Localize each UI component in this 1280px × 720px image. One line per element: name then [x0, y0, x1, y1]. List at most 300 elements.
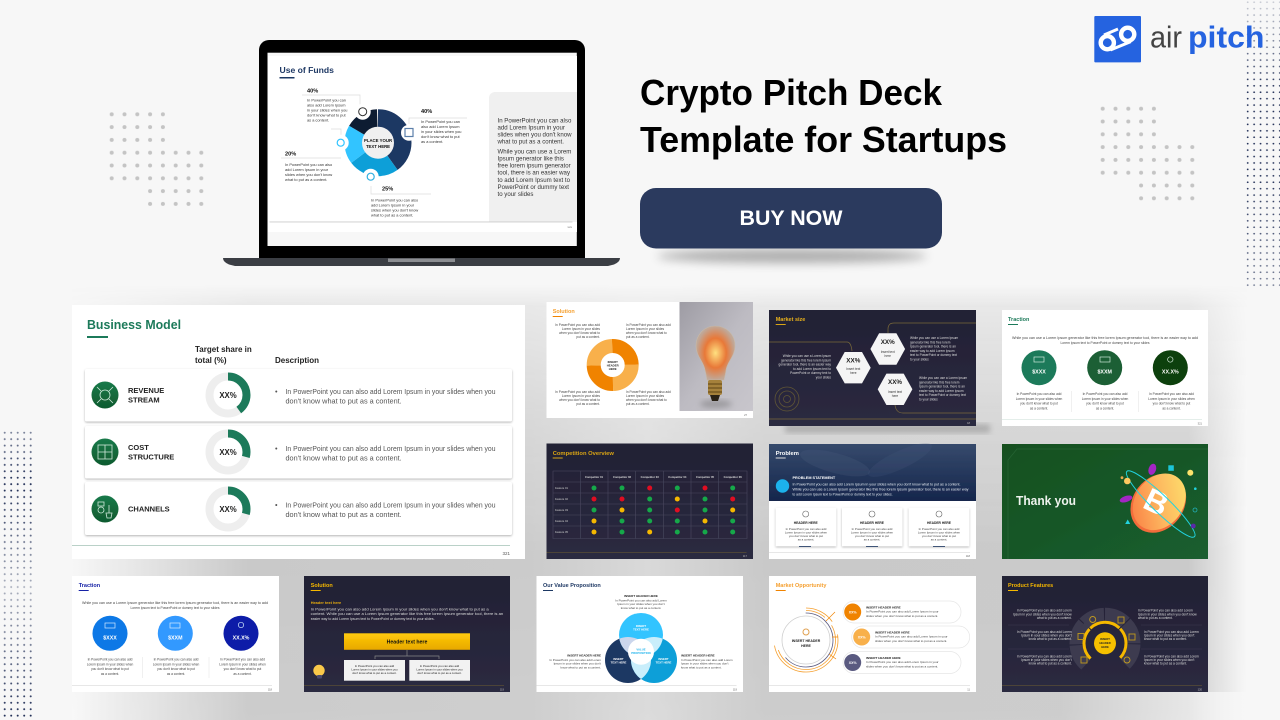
text block top: know what to put as a content. — [621, 606, 661, 610]
metric: $XXM: $XXM — [1097, 370, 1112, 376]
row: revenue stream: STREAM — [128, 396, 160, 404]
hexagon: bottom: XX% — [888, 379, 902, 386]
text block left — [549, 654, 602, 669]
card 2 — [842, 508, 902, 547]
captions: as a content. — [101, 672, 119, 676]
heading: Product Features — [1008, 583, 1053, 589]
photo: light bulb — [680, 302, 753, 411]
side panel: slides when you don't know — [498, 132, 572, 138]
text block right: INSERT HEADER HERE — [681, 654, 715, 658]
captions: In PowerPoint you can also add — [1017, 392, 1062, 396]
venn diagram: TEXT HERE — [633, 628, 649, 632]
row: channels: • — [275, 500, 278, 510]
footer: 120 — [1198, 688, 1203, 692]
text blocks left: Ipsum in your slides when you don't know — [1013, 612, 1072, 616]
footer: 118 — [966, 554, 971, 558]
venn diagram: VALUE — [636, 648, 646, 652]
comparison table: Competitor 02 — [613, 475, 632, 479]
venn diagram: TEXT HERE — [611, 660, 626, 664]
text blocks: While you can use a Lorem Ipsum — [910, 336, 959, 340]
intro text: Lorem Ipsum text to PowerPoint or dummy text to your slides — [130, 606, 220, 610]
text blocks — [555, 323, 671, 406]
text block right — [681, 654, 733, 669]
heading: Traction — [1008, 317, 1030, 323]
heading: Traction — [79, 583, 101, 589]
donut label: HERE — [609, 367, 617, 371]
text box left: In PowerPoint you can also add — [355, 664, 395, 668]
card 1: you don't know what to put — [789, 534, 823, 538]
intro text: While you can use a Lorem Ipsum generator like this free lorem Ipsum generator tool, there is an easier way to add — [82, 601, 268, 605]
body text: In PowerPoint you can also add Lorem Ipsum in your slides when you don't know what to put as a — [311, 608, 489, 612]
item 3 — [843, 652, 961, 674]
dividers — [1072, 391, 1138, 412]
comparison table: Competitor 05 — [696, 475, 715, 479]
text blocks right: Ipsum in your slides when you don't — [1144, 634, 1195, 638]
hexagon: left: XX% — [846, 358, 861, 364]
text blocks — [779, 336, 968, 402]
captions: Lorem Ipsum in your slides when — [1016, 397, 1063, 401]
captions: as a content. — [233, 672, 252, 676]
captions: Lorem Ipsum in your slides when — [1148, 397, 1195, 401]
heading: Thank you — [1016, 493, 1076, 508]
callout 40% left: don't know what to put — [307, 112, 347, 118]
text box left: Lorem Ipsum in your slides when you — [351, 668, 398, 672]
row: channels — [85, 482, 512, 535]
row: channels: In PowerPoint you can also add Lorem Ipsum in your slides when you — [286, 500, 496, 510]
text blocks: generator tool, there is an easier way — [779, 363, 831, 367]
photo header — [769, 437, 976, 501]
comparison table: Competitor 04 — [668, 475, 687, 479]
text blocks: generator like this free lorem Ipsum — [781, 358, 831, 362]
card 2: HEADER HERE — [860, 521, 885, 525]
captions: Lorem Ipsum in your slides when — [219, 662, 266, 666]
captions: Lorem Ipsum in your slides when — [1082, 397, 1129, 401]
card 3: Lorem Ipsum in your slides when — [918, 530, 961, 534]
metric: $XXM: $XXM — [168, 636, 183, 642]
intro text — [82, 601, 268, 610]
text blocks: PowerPoint or dummy text to — [790, 371, 831, 375]
text blocks: when you don't know what to — [559, 331, 600, 335]
icon: chart ring — [775, 387, 799, 411]
side panel — [489, 92, 577, 222]
laptop body — [223, 40, 620, 266]
header box: Header text here — [387, 639, 427, 645]
decorative gold lines — [769, 323, 976, 419]
side panel: to your slides — [498, 191, 533, 198]
metric: XX.X% — [224, 616, 258, 651]
callout 25% — [371, 186, 418, 218]
side panel: add Lorem Ipsum in your — [498, 124, 565, 132]
decorative dot column: top right — [1244, 0, 1280, 289]
donut chart — [354, 118, 402, 167]
heading: Our Value Proposition — [543, 583, 601, 589]
card 3: In PowerPoint you can also add — [919, 527, 960, 531]
text box left — [344, 660, 405, 681]
callout 40% right: don't know what to put — [421, 134, 461, 139]
side panel: to add Lorem Ipsum text to — [498, 177, 571, 184]
callout 40% left: in your slides when you — [307, 108, 347, 112]
subheading: Header text here — [311, 600, 342, 605]
captions: as a content. — [167, 672, 185, 676]
slide: use of funds — [268, 56, 577, 232]
text blocks left: know what to put as a content. — [1029, 637, 1072, 641]
card 1: HEADER HERE — [794, 521, 818, 525]
card 3 — [909, 508, 969, 547]
row: revenue stream: XX% — [219, 391, 237, 400]
callout 40% right — [421, 109, 461, 144]
text blocks left: Ipsum in your slides when you don't — [1021, 658, 1072, 662]
captions: you don't know what to put — [1153, 402, 1190, 406]
text box right: Lorem Ipsum in your slides when you — [416, 668, 463, 672]
side panel: In PowerPoint you can also — [498, 118, 572, 124]
item 2: INSERT HEADER HERE — [875, 630, 910, 634]
text block right: In PowerPoint you can also add Lorem — [681, 658, 733, 662]
logo wordmark: air — [1150, 20, 1182, 55]
slide shadow backdrop — [72, 285, 1247, 720]
text blocks: when you don't know what to — [626, 331, 667, 335]
venn diagram: TEXT HERE — [656, 660, 671, 664]
text blocks left: Ipsum in your slides when you don't — [1021, 634, 1072, 638]
title — [640, 72, 1007, 160]
text blocks: Lorem Ipsum in your slides — [626, 394, 664, 398]
donut centre label: PLACE YOUR — [364, 138, 393, 143]
comparison table: Competitor 03 — [641, 475, 659, 479]
button shadow — [657, 249, 927, 263]
text blocks: text to PowerPoint or dummy text — [919, 393, 966, 397]
card 2: Lorem Ipsum in your slides when — [851, 530, 894, 534]
centre label: HERE — [801, 644, 812, 648]
card 3: you don't know what to put — [922, 534, 956, 538]
callout 20%: slides when you don't know — [285, 172, 332, 177]
footer: 321 — [502, 551, 510, 556]
captions: Lorem Ipsum in your slides when — [87, 662, 134, 666]
centre label — [792, 629, 821, 648]
donut label — [607, 360, 619, 371]
card 2: In PowerPoint you can also add — [852, 527, 893, 531]
text blocks right — [1138, 609, 1199, 666]
slide: traction blue — [72, 576, 279, 692]
radial diagram: HERE — [1101, 645, 1109, 649]
row: channels: don't know what to put as a content. — [286, 510, 402, 519]
slide: problem — [769, 437, 976, 559]
text blocks: text to PowerPoint or dummy text — [910, 353, 957, 357]
venn diagram: INSERT — [613, 657, 624, 661]
donut centre label — [362, 127, 394, 159]
slide: product features — [1002, 576, 1208, 692]
text blocks right: know what to put as a content. — [1144, 637, 1187, 641]
callout 40% right: in your slides when you — [421, 129, 461, 134]
callout 20%: what to put as a content. — [285, 177, 327, 182]
captions: In PowerPoint you can also add — [88, 658, 133, 662]
captions: you don't know what to put — [157, 667, 195, 671]
decorative dot column: bottom left — [4, 432, 32, 717]
callout 40% left — [307, 88, 347, 122]
callout 25%: what to put as a content. — [371, 212, 413, 218]
row: channels: XX% — [219, 505, 237, 514]
heading: Competition Overview — [553, 451, 614, 457]
body text: easier way to add Lorem Ipsum text to PowerPoint or dummy text to your slides. — [311, 617, 435, 621]
text box right: don't know what to put as a content. — [417, 671, 462, 675]
heading: Market size — [776, 317, 805, 323]
text blocks: easier way to add Lorem Ipsum — [919, 389, 964, 393]
callout 40% left: as a content. — [307, 118, 329, 122]
side panel: While you can use a Lorem — [498, 148, 571, 156]
text blocks: put as a content. — [576, 402, 600, 406]
callout 20%: add Lorem Ipsum in your — [285, 167, 329, 172]
text blocks: put as a content. — [626, 335, 650, 339]
text block top: In PowerPoint you can also add Lorem — [615, 598, 667, 602]
row: cost structure: STRUCTURE — [128, 452, 174, 462]
captions: In PowerPoint you can also add — [154, 658, 199, 662]
heading: Solution — [311, 583, 333, 589]
metric: $XXX — [92, 616, 128, 651]
metric: $XXX: $XXX — [103, 636, 117, 642]
row: revenue stream: don't know what to put as a content. — [286, 396, 402, 406]
comparison table: Feature 02 — [555, 497, 569, 501]
captions — [1016, 392, 1195, 410]
text block top: INSERT HEADER HERE — [624, 594, 658, 598]
corner accent — [1008, 449, 1208, 559]
text blocks: generator like this free lorem — [919, 380, 960, 384]
intro text: Lorem Ipsum text to PowerPoint or dummy text to your slides — [1060, 341, 1150, 345]
hexagon: bottom: Insert text — [888, 390, 902, 394]
text blocks: when you don't know what to — [559, 398, 600, 402]
card 1: In PowerPoint you can also add — [786, 527, 827, 531]
text blocks: when you don't know what to — [626, 398, 667, 402]
card 1 — [776, 508, 836, 547]
heading: Business Model — [87, 317, 181, 332]
item 2: In PowerPoint you can also add Lorem Ipsum in your — [875, 635, 948, 639]
text blocks: your slides — [816, 376, 831, 380]
slide title: Use of Funds — [280, 65, 334, 75]
item 2 — [852, 626, 970, 648]
item 1: In PowerPoint you can also add Lorem Ipsum in your — [866, 610, 939, 614]
problem statement: PROBLEM STATEMENT — [792, 476, 836, 480]
captions: as a content. — [1096, 406, 1114, 410]
callout 25%: In PowerPoint you can also — [371, 198, 418, 202]
text blocks: to add Lorem Ipsum text to — [793, 367, 831, 371]
heading: Problem — [776, 451, 799, 457]
item 3: In PowerPoint you can also add Lorem Ipsum in your — [866, 660, 939, 664]
callout 40% left: also add Lorem Ipsum — [307, 102, 346, 108]
text block left: know what to put as a content. — [560, 665, 601, 669]
captions: you don't know what to put — [224, 667, 261, 671]
hexagon: top: XX% — [881, 339, 895, 346]
text blocks: to your slides — [910, 358, 929, 362]
footer: 321 — [1198, 422, 1203, 426]
captions: Lorem Ipsum in your slides when — [153, 662, 200, 666]
metric: XX.X%: XX.X% — [1162, 370, 1179, 376]
backdrop fade bottom right — [1060, 692, 1250, 720]
illustration: bitcoin coin — [1119, 463, 1200, 544]
text blocks right: Ipsum in your slides when you don't know — [1138, 612, 1197, 616]
logo: airpitch — [1094, 16, 1264, 62]
item 1: XX% — [849, 610, 857, 614]
callout 40% left: 40% — [307, 88, 318, 94]
illustration: bitcoin coin: B — [1138, 481, 1175, 523]
arrows — [826, 612, 838, 659]
metric: XX.X% — [1153, 350, 1188, 385]
text blocks left: In PowerPoint you can also add Lorem — [1017, 654, 1072, 658]
hexagon: top: Insert text — [881, 350, 895, 354]
slide: solution dark — [304, 576, 510, 692]
problem statement: In PowerPoint you can also add Lorem Ipsum in your slides when you don't know what to put as a content. — [792, 482, 961, 486]
text blocks: put as a content. — [576, 335, 600, 339]
text blocks: In PowerPoint you can also add — [626, 323, 671, 327]
row: cost structure: don't know what to put as a content. — [286, 454, 402, 462]
text blocks right: In PowerPoint you can also add Lorem — [1144, 630, 1199, 634]
text blocks: Ipsum generator tool, there is an — [910, 345, 956, 349]
text blocks right: what to put as a content. — [1138, 616, 1173, 620]
radial diagram: INSERT — [1100, 637, 1110, 641]
dividers — [143, 657, 209, 678]
row: cost structure: COST — [128, 443, 149, 452]
captions: as a content. — [1162, 406, 1181, 410]
donut label: HEADER — [607, 364, 619, 368]
text blocks: In PowerPoint you can also add — [626, 390, 671, 394]
card 2: you don't know what to put — [855, 534, 889, 538]
callout 20% — [285, 152, 332, 182]
venn diagram: PROPOSITION — [631, 651, 651, 655]
radial diagram — [1064, 602, 1146, 684]
laptop mockup — [223, 40, 620, 266]
side panel: free lorem ipsum generator — [498, 162, 571, 170]
text blocks right: In PowerPoint you can also add Lorem — [1144, 654, 1199, 658]
callout 20%: In PowerPoint you can also — [285, 162, 332, 167]
captions: In PowerPoint you can also add — [1149, 392, 1194, 396]
callout 40% right: as a content. — [421, 139, 443, 144]
slide: market opportunity — [769, 576, 976, 692]
slide: market size — [769, 310, 976, 426]
footer: 119 — [733, 688, 738, 692]
footer: 118 — [268, 688, 273, 692]
comparison table — [553, 471, 747, 538]
item 1 — [843, 601, 961, 623]
text block top: Ipsum in your slides when you don't — [617, 602, 665, 606]
title: Crypto Pitch Deck — [640, 72, 943, 113]
slide: thank you — [1002, 444, 1208, 559]
connector — [375, 650, 439, 659]
captions: In PowerPoint you can also add — [220, 658, 265, 662]
callout 40% right: 40% — [421, 109, 432, 115]
row: channels: CHANNELS — [128, 504, 170, 514]
callout 25%: 25% — [382, 186, 393, 192]
callout 40% right: also add Lorem Ipsum — [421, 124, 460, 129]
donut centre label: TEXT HERE — [366, 144, 390, 149]
icon: light bulb — [313, 665, 325, 678]
intro text — [1012, 336, 1198, 345]
column headers: Target share in — [195, 345, 252, 354]
problem statement: to add Lorem Ipsum text to PowerPoint or dummy text to your slides. — [792, 492, 893, 496]
comparison table: Competitor 06 — [724, 475, 742, 479]
text box right: In PowerPoint you can also add — [420, 664, 460, 668]
text blocks: easier way to add Lorem Ipsum — [910, 349, 955, 353]
text blocks left: In PowerPoint you can also add Lorem — [1017, 630, 1072, 634]
text block top — [615, 594, 667, 610]
captions: you don't know what to put — [1020, 402, 1058, 406]
captions: In PowerPoint you can also add — [1083, 392, 1128, 396]
callout 40% right: In PowerPoint you can — [421, 119, 460, 124]
comparison table: Feature 03 — [555, 508, 569, 512]
metric: $XXM — [158, 616, 193, 651]
text blocks right: In PowerPoint you can also add Lorem — [1138, 609, 1193, 613]
hexagon: bottom — [878, 374, 912, 405]
item 1: INSERT HEADER HERE — [866, 606, 901, 610]
heading: Solution — [553, 309, 575, 315]
captions — [87, 658, 266, 676]
logo mark — [1094, 16, 1141, 62]
card 1: as a content. — [798, 538, 814, 542]
row: cost structure: XX% — [219, 448, 237, 457]
heading — [87, 317, 181, 338]
button: buy now — [640, 188, 942, 248]
metric: $XXM — [1087, 350, 1122, 385]
text blocks left: what to put as a content. — [1037, 616, 1072, 620]
text block right: know what to put as a content. — [681, 665, 722, 669]
slide: traction green — [1002, 310, 1208, 426]
text blocks: Ipsum generator tool, there is an — [919, 385, 965, 389]
intro text: While you can use a Lorem Ipsum generator like this free lorem Ipsum generator tool, there is an easier way to add — [1012, 336, 1198, 340]
problem statement: While you can use a Lorem Ipsum generator like this free lorem Ipsum generator tool, there is an easier way — [792, 487, 969, 491]
text blocks: While you can use a Lorem Ipsum — [919, 376, 968, 380]
column headers: Description — [275, 356, 319, 365]
item 3: slides when you don't know what to put as a content. — [866, 664, 938, 668]
row: revenue stream: • — [275, 387, 278, 396]
text blocks: In PowerPoint you can also add — [555, 390, 600, 394]
hexagon: top — [870, 333, 905, 365]
text blocks: Lorem Ipsum in your slides — [626, 327, 664, 331]
footer: xxx — [568, 225, 572, 229]
text blocks right: Ipsum in your slides when you don't — [1144, 658, 1195, 662]
venn diagram — [605, 613, 677, 683]
captions: you don't know what to put — [91, 667, 129, 671]
row: cost structure: In PowerPoint you can also add Lorem Ipsum in your slides when you — [286, 444, 496, 453]
metric: $XXX: $XXX — [1032, 370, 1046, 376]
text block right: Ipsum in your slides when you don't — [681, 662, 729, 666]
concentric rings — [774, 608, 838, 672]
callout 25%: slides when you don't know — [371, 208, 418, 212]
text box right — [409, 660, 470, 681]
button: buy now: BUY NOW — [740, 207, 843, 230]
callout 25%: add Lorem Ipsum in your — [371, 202, 415, 208]
decorative dot grid: left — [105, 108, 208, 210]
text blocks: Lorem Ipsum in your slides — [562, 394, 600, 398]
text blocks right: know what to put as a content. — [1144, 662, 1187, 666]
text blocks left: know what to put as a content. — [1029, 662, 1072, 666]
item 2: XX% — [858, 636, 866, 640]
comparison table: Feature 05 — [555, 530, 569, 534]
text box left: don't know what to put as a content. — [352, 671, 397, 675]
row: revenue stream: REVENUE — [128, 386, 164, 395]
captions: as a content. — [1030, 406, 1048, 410]
metric: XX.X%: XX.X% — [233, 636, 250, 642]
side panel: tool, there is an easier way — [498, 170, 571, 176]
text block left: Ipsum in your slides when you don't — [554, 662, 601, 666]
hexagon: left: Insert text — [846, 367, 860, 371]
text blocks left — [1013, 609, 1072, 666]
text blocks: In PowerPoint you can also add — [555, 323, 600, 327]
text blocks: generator like this free lorem — [910, 340, 951, 344]
item 1: slides when you don't know what to put as a content. — [866, 614, 938, 618]
card 1: Lorem Ipsum in your slides when — [785, 530, 828, 534]
item 3: XX% — [849, 661, 857, 665]
side panel: Ipsum generator like this — [498, 156, 564, 162]
footer: 11 — [967, 688, 971, 692]
text blocks: While you can use a Lorem Ipsum — [783, 354, 831, 358]
row: cost structure — [85, 426, 512, 478]
item 3: INSERT HEADER HERE — [866, 656, 901, 660]
hexagon: top: here — [885, 354, 891, 358]
